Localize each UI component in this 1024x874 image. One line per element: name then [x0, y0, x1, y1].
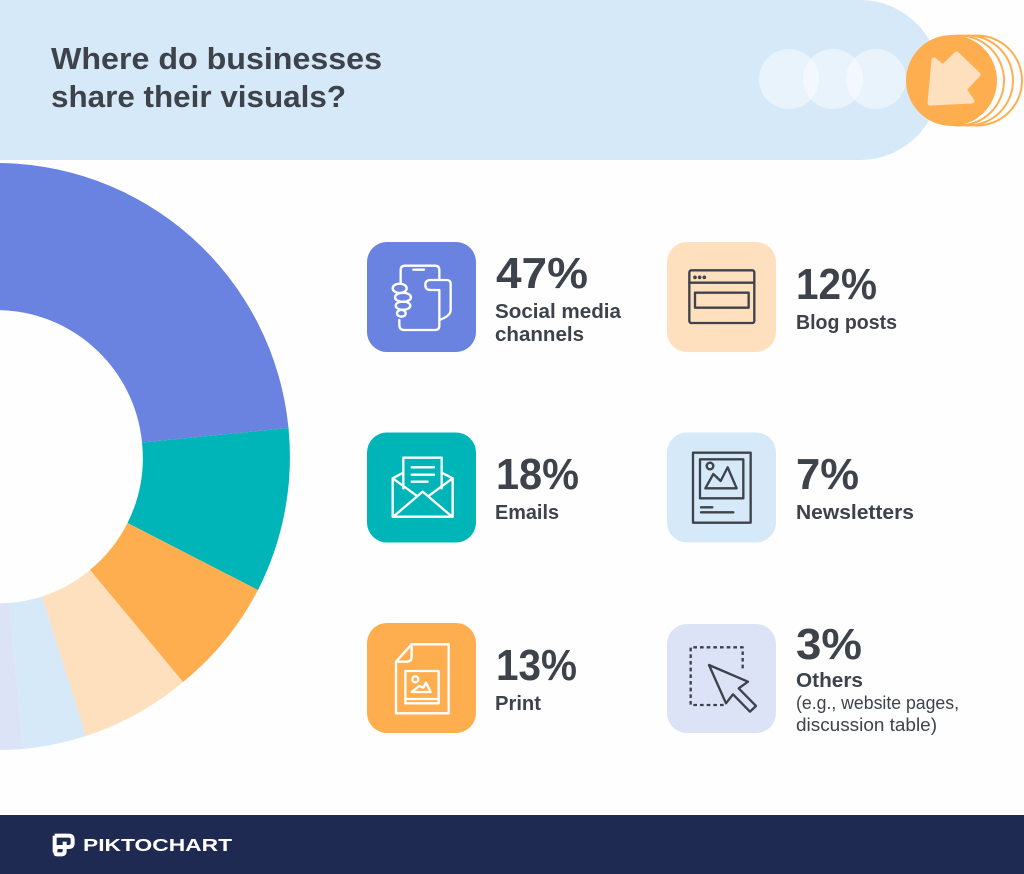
title: Where do businesses — [51, 41, 382, 76]
title — [51, 41, 382, 114]
panel: header banner — [0, 0, 1022, 160]
note: others examples: (e.g., website pages, — [796, 692, 959, 713]
label: emails: Emails — [495, 502, 559, 524]
donut chart — [0, 163, 290, 750]
label: social media channels — [495, 301, 622, 346]
icon: newsletter page — [693, 453, 751, 523]
slice: blog posts 12% — [42, 570, 183, 736]
stat: 47%: 47% — [496, 249, 588, 298]
icon: stacked orange circles with arrow — [906, 35, 1022, 126]
stat: 12%: 12% — [796, 260, 877, 309]
note: others examples: discussion table) — [796, 714, 937, 735]
panel: print — [367, 623, 577, 733]
stat: 13%: 13% — [496, 641, 577, 690]
icon: open envelope — [393, 458, 453, 517]
panel: social media channels — [367, 242, 622, 352]
icon: hand holding phone — [393, 266, 451, 330]
icon: translucent progress circles — [759, 49, 906, 109]
title: share their visuals? — [51, 79, 346, 114]
stat: 7%: 7% — [796, 450, 859, 499]
stat: 3%: 3% — [796, 620, 862, 669]
slice: social media 47% — [0, 163, 288, 442]
icon: piktochart logo — [55, 836, 73, 854]
slice: emails 18% — [128, 428, 290, 590]
icon: browser window — [689, 270, 754, 323]
icon: printed document — [396, 644, 449, 713]
label: blog posts: Blog posts — [796, 312, 897, 334]
note: others examples — [796, 692, 959, 735]
label: social media channels: Social media — [495, 301, 622, 323]
label: social media channels: channels — [495, 324, 584, 346]
label: print: Print — [495, 693, 541, 715]
icon: cursor with dashed selection — [691, 647, 756, 712]
label: others: Others — [796, 670, 863, 692]
label: newsletters: Newsletters — [796, 502, 914, 524]
logo wordmark: PIKTOCHART — [83, 835, 232, 855]
panel: newsletters — [667, 432, 914, 542]
footer bar — [0, 815, 1024, 874]
slice: newsletters 7% — [9, 596, 86, 749]
slice: others 3% — [0, 603, 23, 750]
panel: blog posts — [667, 242, 897, 352]
panel: others — [667, 620, 959, 735]
stat: 18%: 18% — [496, 450, 579, 499]
slice: print 13% — [90, 523, 258, 682]
panel: emails — [367, 432, 579, 542]
